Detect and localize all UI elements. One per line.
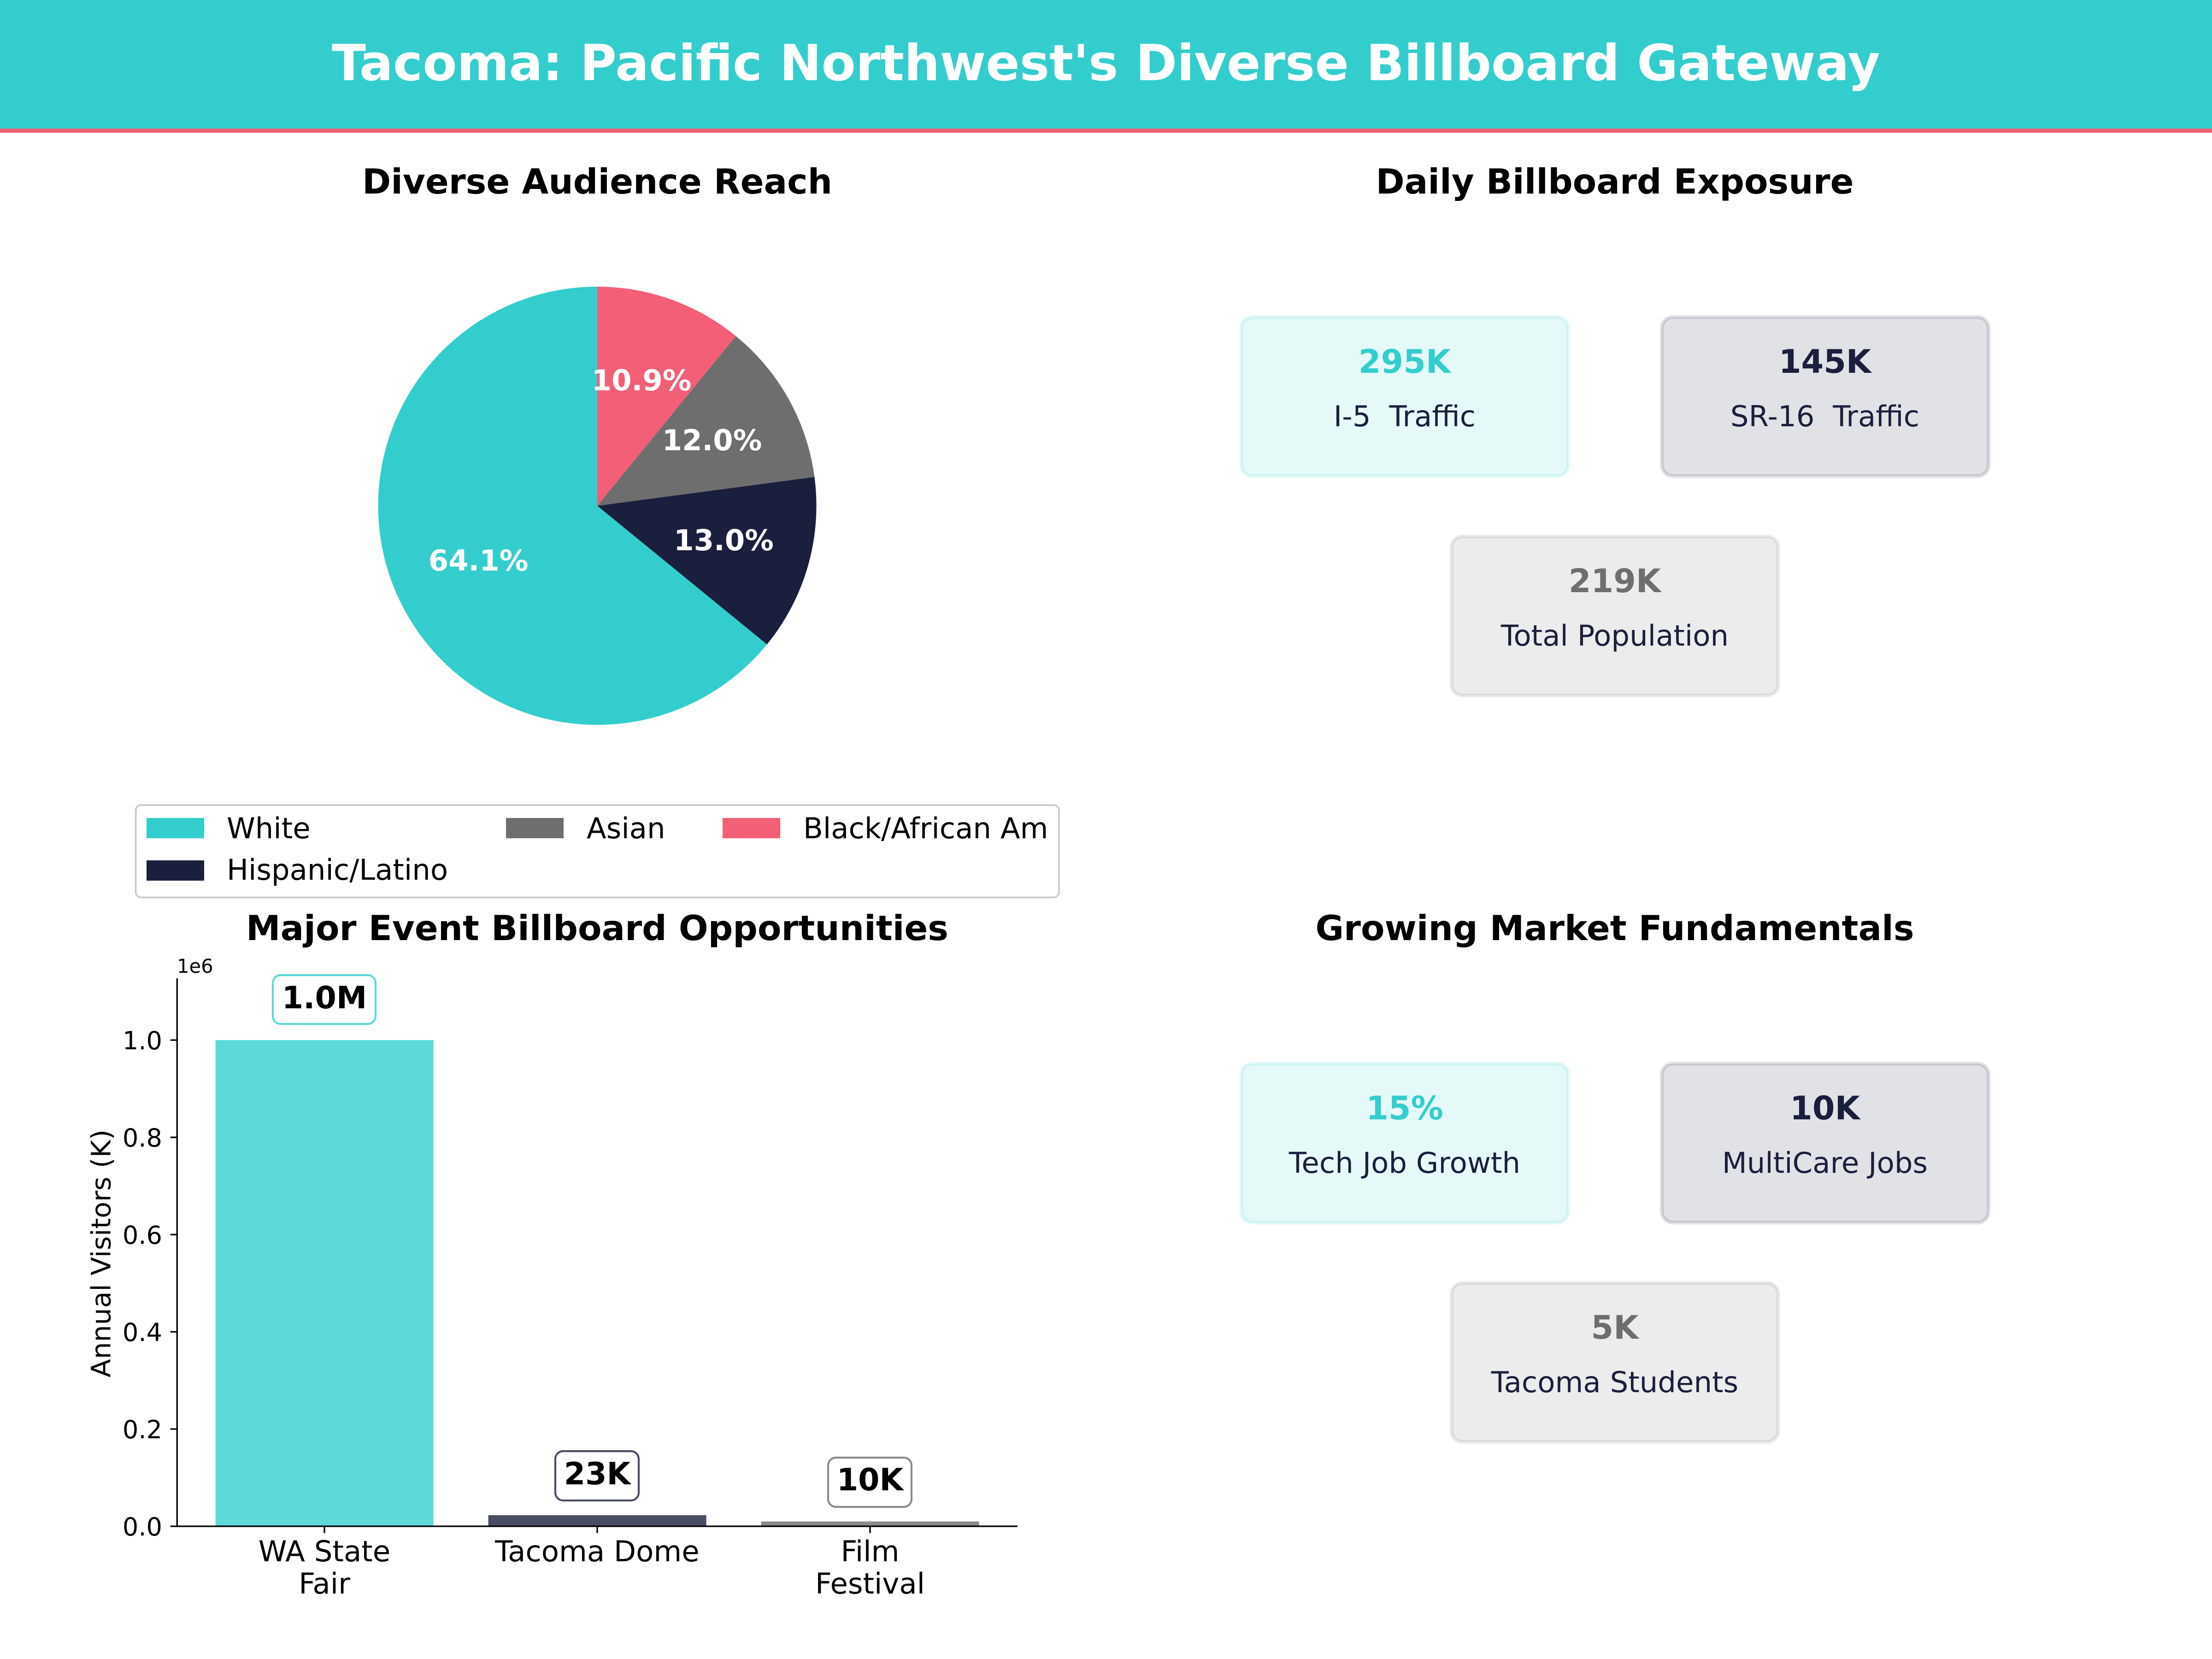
y tick labels — [123, 1026, 162, 1541]
axes — [171, 978, 1018, 1533]
card: total population: Total Population — [1500, 619, 1729, 653]
legend — [135, 805, 1059, 898]
pie chart — [378, 287, 817, 725]
value label: 1.0M: 1.0M — [282, 980, 367, 1016]
card: tech job growth: 15% — [1366, 1089, 1443, 1127]
card: Tacoma students: Tacoma Students — [1491, 1365, 1738, 1399]
y tick labels: 0.4 — [123, 1318, 162, 1347]
pie chart: 64.1% — [429, 544, 528, 577]
x tick labels: WA State — [259, 1535, 390, 1568]
pie chart: 12.0% — [662, 424, 762, 457]
y tick labels: 0.6 — [123, 1221, 162, 1250]
legend: Asian — [587, 812, 665, 845]
y axis title: Annual Visitors (K) — [86, 1130, 117, 1377]
y tick labels: 1.0 — [123, 1026, 162, 1055]
y tick labels: 0.2 — [123, 1415, 162, 1444]
card: Tacoma students: 5K — [1591, 1309, 1640, 1347]
card: I-5 traffic — [1241, 317, 1568, 476]
legend: White — [227, 812, 311, 845]
legend: Black/African Am — [803, 812, 1048, 845]
heading: diverse audience reach: Diverse Audience Reach — [362, 161, 832, 202]
card: I-5 traffic: I-5 Traffic — [1334, 400, 1476, 433]
value label: 23K — [555, 1451, 639, 1500]
value label: 10K: 10K — [837, 1462, 905, 1498]
heading: major event billboard opportunities: Major Event Billboard Opportunities — [246, 908, 948, 948]
x tick labels: Tacoma Dome — [494, 1535, 700, 1568]
pie chart: 10.9% — [592, 364, 691, 397]
card: MultiCare jobs: MultiCare Jobs — [1722, 1146, 1928, 1180]
x tick labels: Film — [841, 1535, 900, 1568]
heading: growing market fundamentals: Growing Market Fundamentals — [1315, 908, 1914, 948]
value label: 23K: 23K — [564, 1456, 632, 1492]
x tick labels: Fair — [299, 1567, 350, 1600]
x tick labels: Festival — [815, 1567, 925, 1600]
panel: diverse audience reach — [135, 161, 1059, 898]
y tick labels: 0.8 — [123, 1124, 162, 1153]
value label: 10K — [828, 1458, 912, 1507]
panel: daily billboard exposure — [1241, 161, 1988, 695]
y tick labels: 0.0 — [123, 1512, 162, 1541]
y axis offset label: 1e6 — [177, 955, 213, 977]
panel: growing market fundamentals — [1241, 908, 1988, 1442]
x tick labels — [259, 1535, 925, 1600]
bar chart — [86, 955, 1018, 1600]
panel: major event billboard opportunities — [86, 908, 1018, 1600]
bars — [216, 1040, 979, 1526]
legend: Hispanic/Latino — [227, 853, 448, 887]
card: I-5 traffic: 295K — [1359, 343, 1452, 381]
value label: 1.0M — [273, 975, 376, 1024]
title: Tacoma: Pacific Northwest's Diverse Billboard Gateway — [332, 34, 1880, 92]
card: MultiCare jobs — [1662, 1064, 1988, 1223]
heading: daily billboard exposure: Daily Billboard Exposure — [1376, 161, 1853, 202]
card: MultiCare jobs: 10K — [1790, 1089, 1861, 1127]
pie chart: 13.0% — [674, 524, 774, 557]
header banner — [0, 0, 2212, 133]
card: tech job growth — [1241, 1064, 1568, 1223]
card: tech job growth: Tech Job Growth — [1288, 1146, 1520, 1180]
card: total population — [1452, 536, 1778, 695]
card: SR-16 traffic: 145K — [1779, 343, 1872, 381]
card: total population: 219K — [1569, 562, 1662, 600]
card: Tacoma students — [1452, 1283, 1778, 1442]
card: SR-16 traffic — [1662, 317, 1988, 476]
card: SR-16 traffic: SR-16 Traffic — [1730, 400, 1919, 433]
